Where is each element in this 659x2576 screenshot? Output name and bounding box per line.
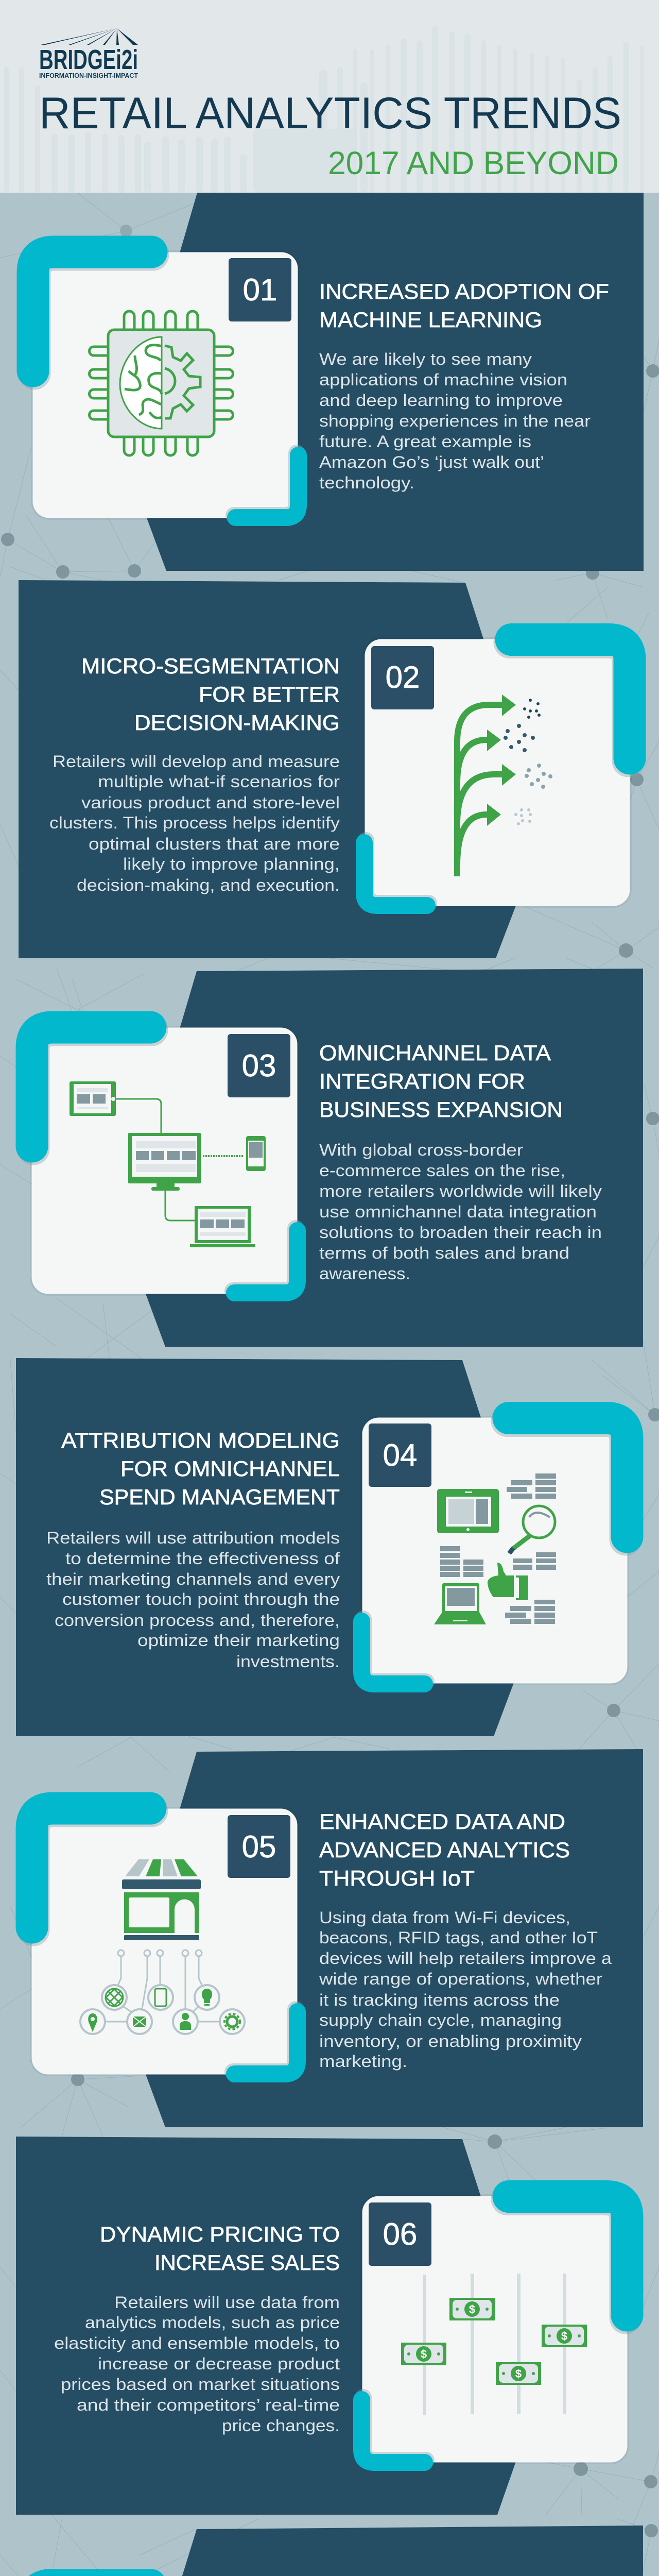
icon: branching arrows and data clusters (457, 694, 552, 876)
panel: 06 dynamic pricing (16, 2137, 629, 2515)
icon: chip with brain and gear (90, 311, 233, 455)
panel 06 card: 06 (383, 2217, 417, 2251)
body text 06: price changes. (222, 2416, 340, 2435)
heading 03: INTEGRATION FOR (319, 1069, 525, 1093)
icon: price sliders with banknotes: $ (469, 2303, 475, 2316)
heading 02 (81, 654, 340, 735)
heading 03: BUSINESS EXPANSION (319, 1097, 563, 1122)
body text 04: to determine the effectiveness of (65, 1549, 340, 1568)
heading 01: INCREASED ADOPTION OF (319, 279, 609, 303)
panel 02 card (363, 637, 632, 908)
body text 04: Retailers will use attribution models (46, 1529, 340, 1547)
panel 05 background (121, 1749, 643, 2127)
body text 04 (46, 1529, 340, 1671)
body text 03: use omnichannel data integration (319, 1202, 597, 1221)
body text 04: customer touch point through the (62, 1590, 340, 1608)
heading 01: MACHINE LEARNING (319, 308, 542, 332)
body text 02: Retailers will develop and measure (53, 752, 340, 771)
icon: devices, magnifier and thumbs up (434, 1473, 556, 1624)
panel: 01 machine learning (31, 193, 644, 571)
body text 03: more retailers worldwide will likely (319, 1182, 602, 1200)
body text 02: various product and store-level (81, 793, 340, 812)
panel 03 card: 03 (242, 1048, 276, 1083)
panel 02 card: 02 (386, 660, 420, 694)
body text 01: Amazon Go’s ‘just walk out’ (319, 453, 544, 471)
body text 05: beacons, RFID tags, and other IoT (319, 1928, 598, 1947)
icon: connected devices (70, 1081, 266, 1247)
icon: price sliders with banknotes: $ (515, 2367, 522, 2380)
heading 06: INCREASE SALES (154, 2250, 340, 2275)
heading 04: SPEND MANAGEMENT (99, 1485, 340, 1509)
panel: 05 enhanced data and IoT (30, 1749, 643, 2127)
subtitle: 2017 AND BEYOND (328, 145, 619, 181)
panel 05 card (30, 1807, 299, 2076)
body text 06: and their competitors’ real-time (77, 2396, 340, 2414)
body text 03: With global cross-border (319, 1141, 523, 1159)
body text 05: Using data from Wi-Fi devices, (319, 1908, 570, 1927)
panel 01 card: 01 (243, 273, 277, 307)
body text 01 (319, 350, 591, 492)
panel 07 background (118, 2526, 643, 2576)
panel 01 card (31, 250, 300, 520)
panel 03 card (30, 1026, 299, 1296)
skyline bar pattern (4, 26, 644, 193)
body text 01: and deep learning to improve (319, 391, 563, 410)
panel: 03 omnichannel data integration (30, 969, 643, 1347)
logo wordmark: BRIDGEi2i (39, 44, 138, 75)
heading 01 (319, 279, 609, 332)
body text 06: elasticity and ensemble models, to (54, 2334, 340, 2352)
panel: 02 micro-segmentation (19, 580, 632, 958)
body text 02: optimal clusters that are more (89, 835, 340, 853)
body text 03: solutions to broaden their reach in (319, 1223, 602, 1242)
body text 01: technology. (319, 473, 414, 492)
panel 04 card (360, 1416, 629, 1685)
heading 05 (319, 1809, 570, 1890)
panel 03 background (121, 969, 643, 1347)
logo tagline: INFORMATION-INSIGHT-IMPACT (39, 72, 138, 79)
body text 04: their marketing channels and every (46, 1570, 340, 1588)
body text 05: it is tracking items across the (319, 1991, 560, 2009)
panel 05 card: 05 (242, 1829, 276, 1864)
body text 03 (319, 1141, 602, 1283)
panel 04 card: 04 (383, 1438, 417, 1472)
body text 04: conversion process and, therefore, (55, 1611, 340, 1630)
heading 03 (319, 1041, 563, 1122)
heading 05: ENHANCED DATA AND (319, 1809, 565, 1834)
heading 05: ADVANCED ANALYTICS (319, 1838, 570, 1862)
body text 02: clusters. This process helps identify (49, 814, 340, 832)
body text 02 (49, 752, 340, 894)
panel 06 card (360, 2194, 629, 2464)
body text 03: awareness. (319, 1264, 410, 1283)
body text 01: We are likely to see many (319, 350, 532, 368)
body text 05 (319, 1908, 612, 2071)
body text 06: prices based on market situations (61, 2375, 340, 2394)
heading 06 (100, 2222, 340, 2275)
logo fan mark (41, 28, 138, 45)
title: RETAIL ANALYTICS TRENDS (39, 89, 621, 138)
body text 05: wide range of operations, whether (319, 1970, 602, 1988)
panel: 07 assortment management (30, 2526, 643, 2576)
body text 02: decision-making, and execution. (77, 876, 340, 894)
header band (0, 0, 659, 193)
body text 05: inventory, or enabling proximity (319, 2032, 582, 2050)
icon: price sliders with banknotes: $ (421, 2348, 427, 2361)
body text 02: likely to improve planning, (123, 855, 340, 873)
panel 02 background (19, 580, 545, 958)
body text 04: optimize their marketing (137, 1631, 340, 1650)
body text 06: analytics models, such as price (85, 2313, 340, 2332)
panel: 04 attribution modeling (16, 1358, 629, 1736)
body text 03: e-commerce sales on the rise, (319, 1161, 565, 1180)
body text 03: terms of both sales and brand (319, 1244, 569, 1262)
logo (39, 28, 138, 79)
heading 02: FOR BETTER (199, 682, 340, 706)
body text 04: investments. (236, 1652, 340, 1671)
heading 02: DECISION-MAKING (134, 710, 340, 735)
body text 06: Retailers will use data from (114, 2293, 340, 2312)
heading 04: FOR OMNICHANNEL (120, 1456, 340, 1481)
body text 05: supply chain cycle, managing (319, 2011, 562, 2029)
icon: price sliders with banknotes: $ (561, 2330, 567, 2343)
panel 04 background (16, 1358, 542, 1736)
heading 04 (61, 1428, 340, 1509)
body text 06: increase or decrease product (98, 2354, 340, 2373)
icon: connected store (80, 1859, 245, 2034)
body text 01: future. A great example is (319, 432, 531, 451)
panel 06 background (16, 2137, 542, 2515)
panel 01 background (122, 193, 644, 571)
body text 05: devices will help retailers improve a (319, 1949, 612, 1968)
heading 02: MICRO-SEGMENTATION (81, 654, 340, 678)
body text 06 (54, 2293, 340, 2435)
body text 01: applications of machine vision (319, 370, 567, 389)
body text 02: multiple what-if scenarios for (98, 772, 340, 791)
body text 01: shopping experiences in the near (319, 412, 591, 430)
heading 06: DYNAMIC PRICING TO (100, 2222, 340, 2246)
heading 05: THROUGH IoT (319, 1866, 475, 1890)
body text 05: marketing. (319, 2052, 407, 2071)
icon: price sliders with banknotes (401, 2274, 587, 2415)
heading 04: ATTRIBUTION MODELING (61, 1428, 340, 1452)
heading 03: OMNICHANNEL DATA (319, 1041, 551, 1065)
